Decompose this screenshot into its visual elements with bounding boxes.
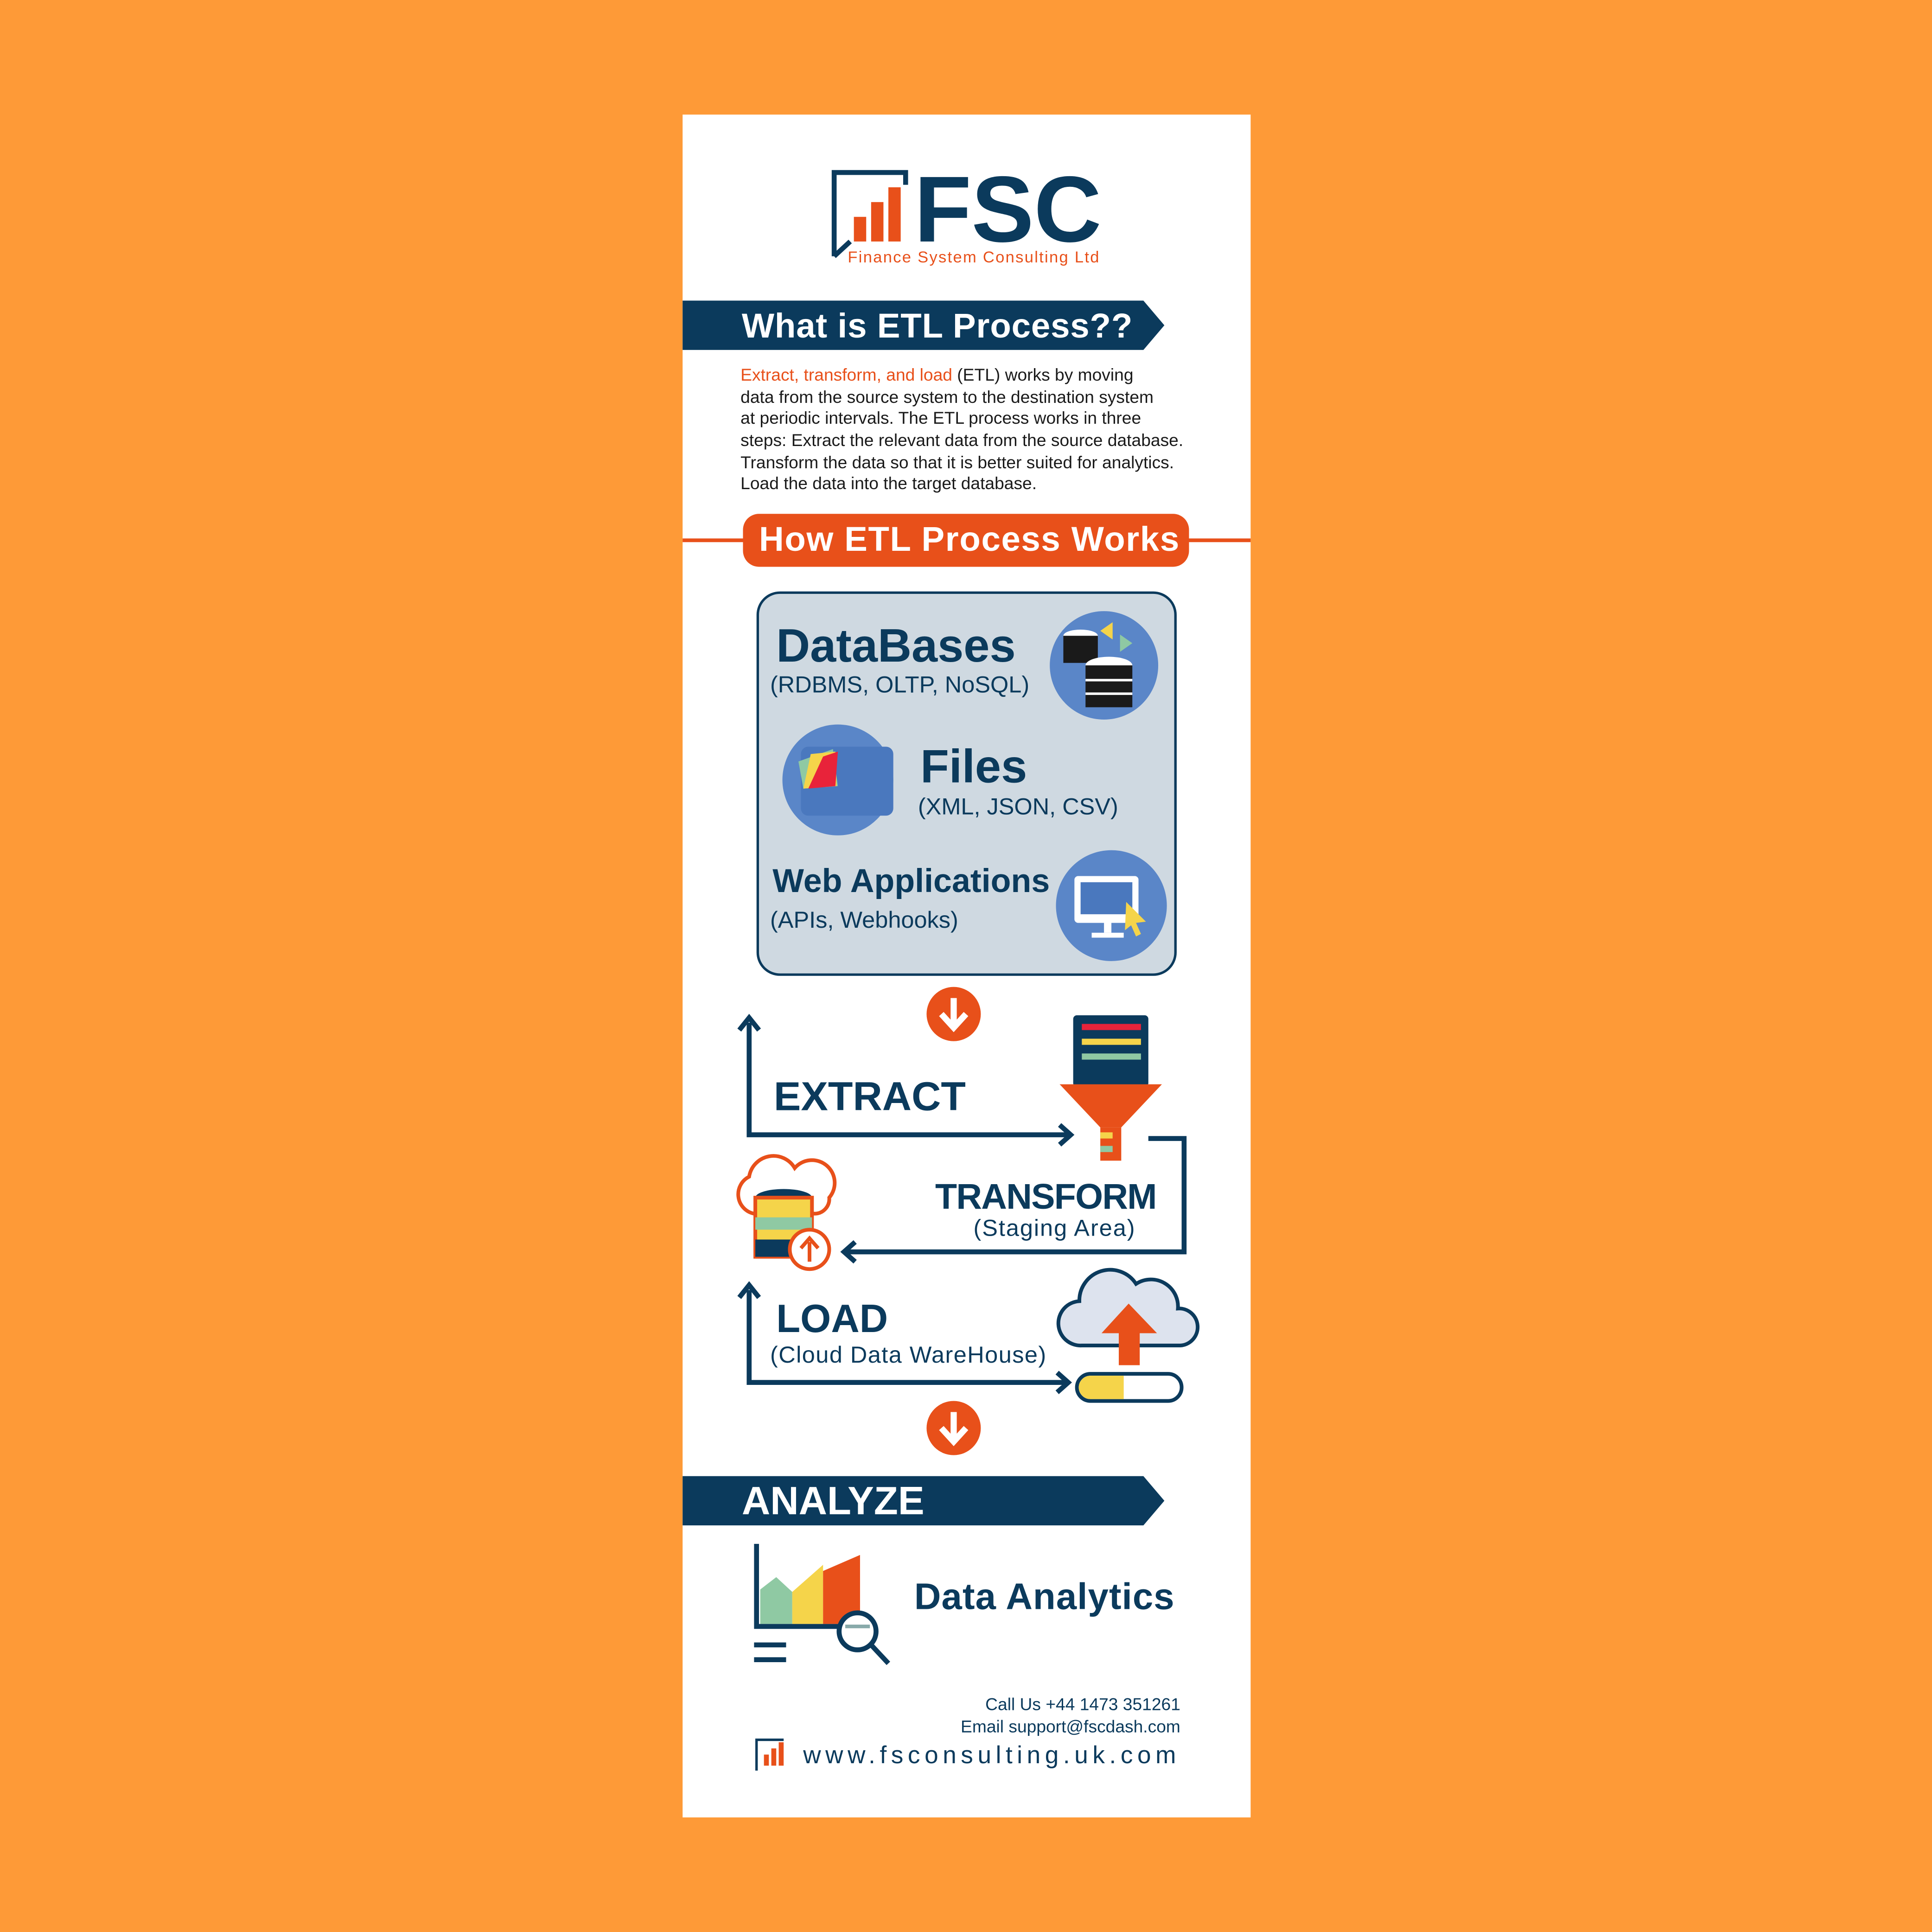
load step [740,1285,1068,1392]
contact info: Call Us +44 1473 351261 [985,1695,1180,1714]
intro paragraph: Transform the data so that it is better suited for analytics. [740,453,1174,472]
logo: FSC [914,157,1102,261]
icon: cloud database [738,1156,835,1269]
logo: Finance System Consulting Ltd [848,249,1099,266]
panel: data sources: (APIs, Webhooks) [770,906,958,933]
panel: data sources: Web Applications [772,862,1050,899]
heading: How ETL Process Works [682,514,1250,567]
transform step [844,1139,1184,1262]
banner: what is ETL: What is ETL Process?? [742,306,1132,345]
icon: analytics chart [754,1544,888,1664]
transform step: TRANSFORM [935,1177,1157,1217]
banner: what is ETL [682,300,1164,350]
arrow: down 1 [926,987,981,1041]
logo [834,157,1102,266]
panel: data sources: (RDBMS, OLTP, NoSQL) [770,671,1029,698]
icon: databases [1050,611,1158,720]
icon: funnel [1059,1015,1162,1160]
load step: (Cloud Data WareHouse) [770,1341,1046,1368]
banner: analyze [682,1476,1164,1525]
panel: data sources [758,593,1175,975]
intro paragraph: Load the data into the target database. [740,473,1037,493]
contact info: Email support@fscdash.com [961,1716,1180,1736]
load step: LOAD [776,1297,888,1341]
transform step: (Staging Area) [973,1214,1135,1241]
contact info [803,1695,1180,1769]
extract step [740,1018,1071,1145]
heading: data analytics: Data Analytics [914,1576,1174,1617]
panel: data sources: DataBases [776,620,1016,672]
intro paragraph [740,365,1183,493]
banner: analyze: ANALYZE [742,1479,925,1523]
intro paragraph: data from the source system to the destination system [740,387,1154,407]
icon: files [783,725,893,835]
icon: small logo [757,1740,784,1771]
white panel [682,115,1250,1817]
icon: monitor [1056,850,1167,961]
contact info: www.fsconsulting.uk.com [803,1741,1180,1769]
intro paragraph: steps: Extract the relevant data from the source database. [740,430,1183,450]
intro paragraph: at periodic intervals. The ETL process works in three [740,408,1141,427]
heading: How ETL Process Works: How ETL Process Works [759,520,1179,558]
panel: data sources: (XML, JSON, CSV) [918,793,1118,820]
extract step: EXTRACT [774,1073,966,1119]
icon: cloud upload [1058,1270,1198,1401]
arrow: down 2 [926,1401,981,1455]
panel: data sources: Files [920,741,1027,793]
intro paragraph: Extract, transform, and load (ETL) works by moving [740,365,1134,384]
